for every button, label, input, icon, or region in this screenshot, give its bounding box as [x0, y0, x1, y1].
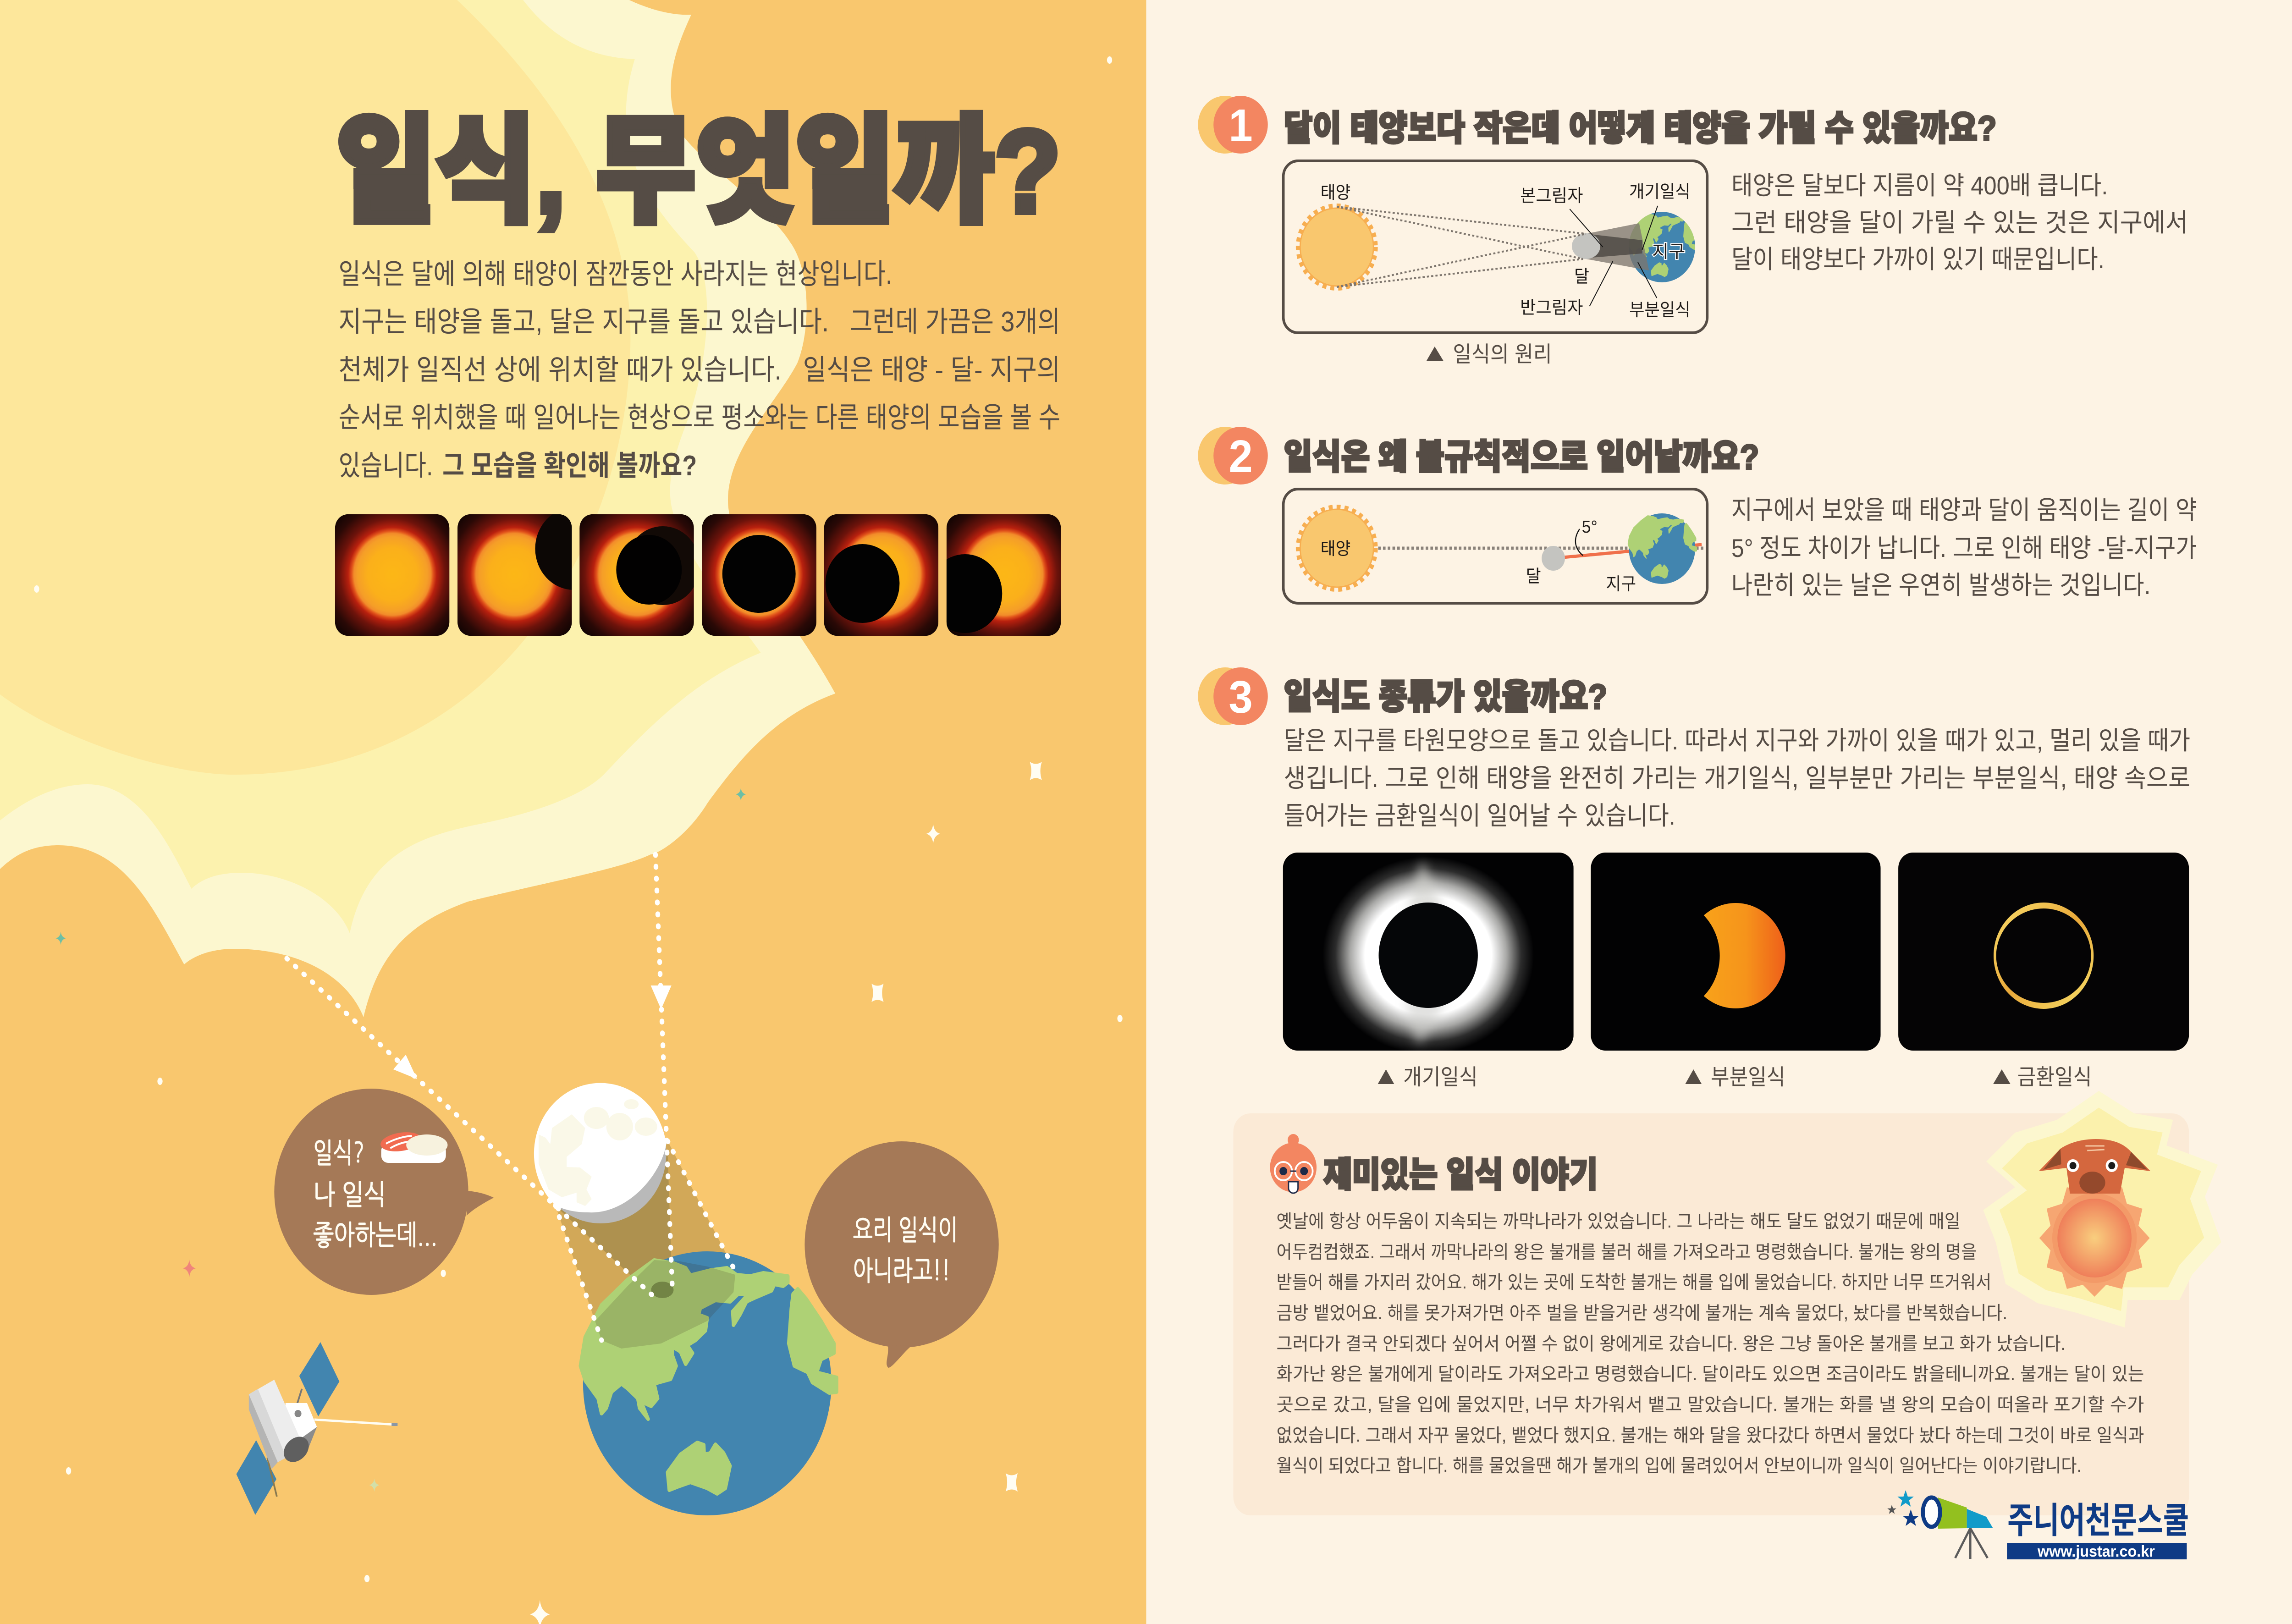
sun middle rays [0, 0, 760, 933]
icon: telescope [1887, 1490, 1993, 1559]
speech bubble: sushi: 나 일식 [313, 1181, 386, 1208]
satellite [237, 1342, 397, 1515]
icon: sun: 태양 [1321, 539, 1350, 558]
text: section 2: 5° 정도 차이가 납니다. 그로 인해 태양 -달-지구가 [1731, 534, 2197, 562]
text: story [1277, 1211, 2144, 1476]
icon: sun [1299, 508, 1375, 589]
diagram: eclipse principle [1284, 161, 1707, 333]
text: story: 금방 뱉었어요. 해를 못가져가면 아주 벌을 받을거란 생각에 불개는 계속 물었다, 놨다를 반복했습니다. [1277, 1303, 2007, 1323]
panel: story [1233, 1113, 2189, 1515]
eclipse sequence photos [335, 514, 1061, 636]
speech bubble: not food: 요리 일식이 [853, 1217, 958, 1244]
diagram: eclipse principle: 태양 [1321, 183, 1350, 202]
badge: 2 [1198, 427, 1268, 484]
speech bubble: not food [804, 1141, 999, 1368]
text: story: 없었습니다. 그래서 자꾸 물었다, 뱉었다 했지요. 불개는 해와 달을 왔다갔다 하면서 물었다 놨다 하는데 그것이 바로 일식과 [1277, 1425, 2144, 1446]
logo: junior astronomy school: www.justar.co.kr [2037, 1542, 2155, 1560]
text: section 3: 생깁니다. 그로 인해 태양을 완전히 가리는 개기일식, 일부분만 가리는 부분일식, 태양 속으로 [1284, 764, 2190, 793]
badge: 1: 1 [1229, 99, 1253, 151]
diagram: eclipse principle: 본그림자 [1520, 186, 1583, 205]
speech bubble: sushi [274, 1089, 494, 1295]
diagram: eclipse principle: 반그림자 [1520, 298, 1583, 317]
stars and dots [34, 56, 1123, 1624]
intro text: 그 모습을 확인해 볼까요? [442, 450, 697, 481]
penumbra shadow [556, 1141, 733, 1340]
text: section 3 [1284, 726, 2190, 830]
sun disc [0, 0, 630, 775]
diagram: 5 degree tilt [1284, 489, 1707, 603]
captions: eclipse types: 부분일식 [1711, 1065, 1785, 1089]
panel: right background [1146, 0, 2292, 1624]
diagram: 5 degree tilt: 5° [1582, 517, 1598, 536]
heading 2: 일식은 왜 불규칙적으로 일어날까요? [1284, 437, 1759, 476]
text: section 1: 태양은 달보다 지름이 약 400배 큽니다. [1731, 171, 2108, 200]
sun outer rays [0, 0, 835, 1017]
text: story: 그러다가 결국 안되겠다 싶어서 어쩔 수 없이 왕에게로 갔습니다. 왕은 그냥 돌아온 불개를 보고 화가 났습니다. [1277, 1333, 2066, 1354]
heading 3: 일식도 종류가 있을까요? [1284, 677, 1607, 716]
intro text [338, 258, 1060, 481]
moon [534, 1083, 666, 1223]
heading 1: 달이 태양보다 작은데 어떻게 태양을 가릴 수 있을까요? [1284, 109, 1997, 148]
photo: partial eclipse [1591, 853, 1881, 1051]
speech bubble: sushi: 좋아하는데... [313, 1222, 437, 1249]
intro text: 천체가 일직선 상에 위치할 때가 있습니다. 일식은 태양 - 달- 지구의 [338, 354, 1060, 385]
text: story: 옛날에 항상 어두움이 지속되는 까막나라가 있었습니다. 그 나라는 해도 달도 없었기 때문에 매일 [1277, 1211, 1961, 1232]
diagram: eclipse principle: 부분일식 [1629, 300, 1691, 319]
intro text: 지구는 태양을 돌고, 달은 지구를 돌고 있습니다. 그런데 가끔은 3개의 [338, 306, 1060, 337]
panel: left background [0, 0, 1146, 1624]
captions: eclipse types: 금환일식 [2017, 1065, 2092, 1089]
badge: 1 [1198, 96, 1268, 154]
text: section 1 [1731, 171, 2188, 274]
text: section 3: 들어가는 금환일식이 일어날 수 있습니다. [1284, 801, 1675, 830]
text: story: 받들어 해를 가지러 갔어요. 해가 있는 곳에 도착한 불개는 해를 입에 물었습니다. 하지만 너무 뜨거워서 [1277, 1272, 1991, 1293]
icon: mascot [1270, 1134, 1317, 1193]
icon: fire dog and sun [1983, 1091, 2221, 1327]
earth [580, 1251, 837, 1515]
diagram: 5 degree tilt: 달 [1526, 567, 1541, 586]
speech bubble: sushi: 일식? [313, 1140, 364, 1167]
icon: earth small [1628, 513, 1697, 584]
icon: earth small [1628, 212, 1697, 282]
photo: total eclipse [1283, 853, 1574, 1054]
title: 일식, 무엇일까? [336, 106, 1061, 237]
heading: story: 재미있는 일식 이야기 [1323, 1155, 1598, 1194]
umbra shadow [558, 1151, 672, 1295]
diagram: eclipse principle: 달 [1574, 267, 1589, 286]
caption: principle: 일식의 원리 [1453, 342, 1552, 366]
photo: annular eclipse [1898, 853, 2189, 1051]
text: section 2: 지구에서 보았을 때 태양과 달이 움직이는 길이 약 [1731, 496, 2197, 524]
intro text: 일식은 달에 의해 태양이 잠깐동안 사라지는 현상입니다. [338, 258, 892, 290]
text: story: 곳으로 갔고, 달을 입에 물었지만, 너무 차가워서 뱉고 말았습니다. 불개는 화를 낼 왕의 모습이 떠올라 포기할 수가 [1277, 1394, 2144, 1415]
text: section 3: 달은 지구를 타원모양으로 돌고 있습니다. 따라서 지구와 가까이 있을 때가 있고, 멀리 있을 때가 [1284, 726, 2190, 755]
diagram: eclipse principle: 개기일식 [1629, 182, 1691, 201]
text: story: 화가난 왕은 불개에게 달이라도 가져오라고 명령했습니다. 달이라도 있으면 조금이라도 밝을테니까요. 불개는 달이 있는 [1277, 1364, 2144, 1384]
icon: sushi [380, 1130, 447, 1163]
text: story: 월식이 되었다고 합니다. 해를 물었을땐 해가 불개의 입에 물려있어서 안보이니까 일식이 일어난다는 이야기랍니다. [1277, 1455, 2082, 1476]
intro text: 순서로 위치했을 때 일어나는 현상으로 평소와는 다른 태양의 모습을 볼 수 [338, 402, 1060, 433]
logo: junior astronomy school: 주니어천문스쿨 [2007, 1501, 2189, 1541]
badge: 3 [1198, 667, 1268, 725]
captions: eclipse types [1378, 1065, 2092, 1089]
text: section 2 [1731, 496, 2197, 600]
diagram: 5 degree tilt: 지구 [1606, 574, 1636, 594]
text: section 2: 나란히 있는 날은 우연히 발생하는 것입니다. [1731, 571, 2150, 600]
badge: 2: 2 [1229, 430, 1253, 482]
captions: eclipse types: 개기일식 [1403, 1065, 1478, 1089]
speech bubble: not food: 아니라고!! [853, 1257, 950, 1284]
icon: sun [1299, 207, 1375, 287]
text: story: 어두컴컴했죠. 그래서 까막나라의 왕은 불개를 불러 해를 가져오라고 명령했습니다. 불개는 왕의 명을 [1277, 1242, 1977, 1262]
text: section 1: 그런 태양을 달이 가릴 수 있는 것은 지구에서 [1731, 209, 2188, 237]
badge: 3: 3 [1229, 671, 1253, 723]
logo: junior astronomy school [1887, 1490, 2189, 1560]
text: section 1: 달이 태양보다 가까이 있기 때문입니다. [1731, 245, 2105, 274]
dotted light ray arrows [287, 854, 733, 1340]
intro text: 있습니다. [338, 450, 433, 481]
diagram: eclipse principle: 지구 [1652, 242, 1685, 261]
